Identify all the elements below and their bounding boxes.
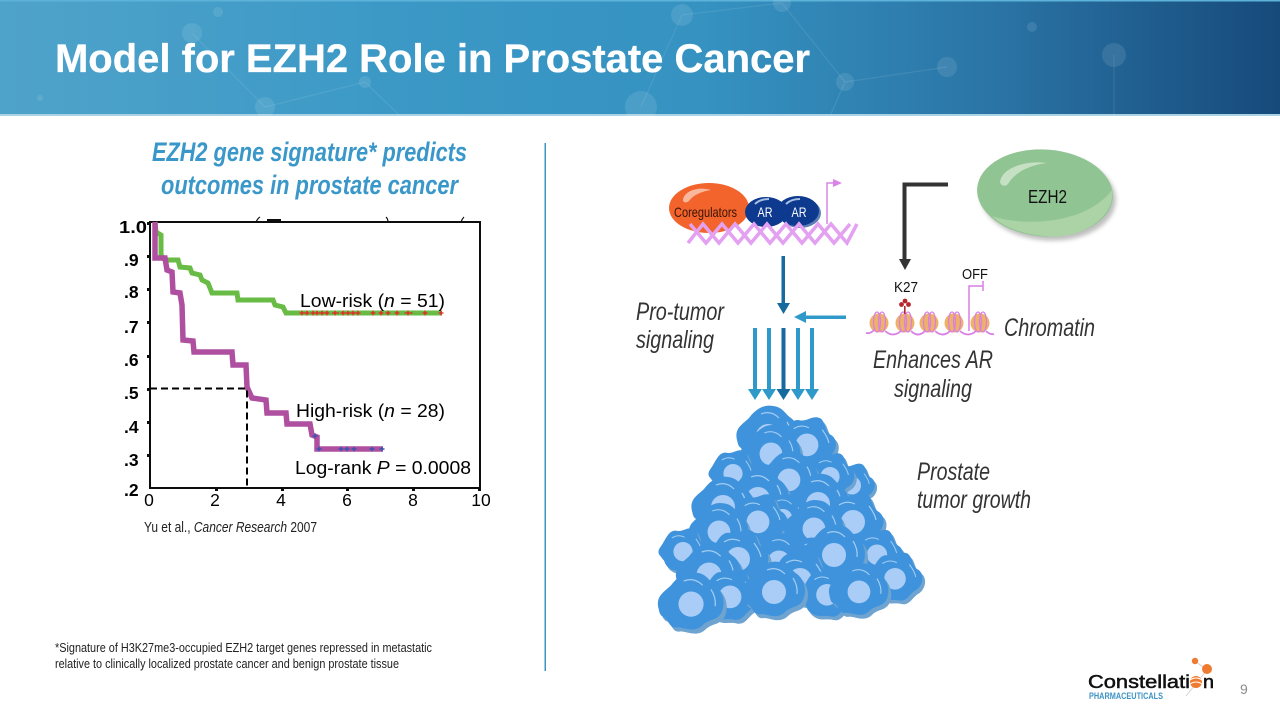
Kaplan-Meier survival chart <box>119 217 491 510</box>
coregulators oval: Coregulators <box>674 204 737 220</box>
Kaplan-Meier survival chart: .8 <box>124 282 139 302</box>
company logo: n <box>1203 672 1214 692</box>
Kaplan-Meier survival chart: .4 <box>124 417 139 437</box>
methyl mark <box>899 299 911 314</box>
Kaplan-Meier survival chart: 10 <box>471 490 491 510</box>
Kaplan-Meier survival chart: 0 <box>144 490 154 510</box>
title: Model for EZH2 Role in Prostate Cancer <box>55 37 810 81</box>
Kaplan-Meier survival chart: .9 <box>124 250 139 270</box>
Kaplan-Meier survival chart: 2 <box>210 490 220 510</box>
label: pro-tumor signaling: signaling <box>636 326 714 354</box>
page number: 9 <box>1240 681 1248 697</box>
Kaplan-Meier survival chart: Low-risk ( n = 51) <box>300 291 445 311</box>
arrows: pro-tumor signaling <box>748 328 819 400</box>
footnote <box>55 640 432 671</box>
DNA with coregulators and AR <box>669 179 857 243</box>
label: pro-tumor signaling <box>636 298 725 354</box>
DNA helix <box>688 224 857 243</box>
label: prostate tumor growth: tumor growth <box>917 486 1031 514</box>
chromatin nucleosomes <box>866 267 994 334</box>
EZH2 enzyme oval: EZH2 <box>1028 186 1067 207</box>
label: pro-tumor signaling: Pro-tumor <box>636 298 725 326</box>
divider <box>544 143 546 671</box>
footnote: *Signature of H3K27me3-occupied EZH2 target genes repressed in metastatic <box>55 640 432 655</box>
company logo: Constellati <box>1088 672 1190 692</box>
company logo <box>1088 658 1214 701</box>
Kaplan-Meier survival chart: .6 <box>124 350 139 370</box>
label: enhances AR signaling: signaling <box>894 375 972 403</box>
AR dimer <box>745 196 821 228</box>
Kaplan-Meier survival chart: 1.0 <box>119 217 147 237</box>
label: prostate tumor growth <box>917 458 1031 514</box>
heading: gene signature <box>152 137 467 200</box>
label: chromatin: Chromatin <box>1004 314 1095 342</box>
Kaplan-Meier survival chart: 8 <box>408 490 418 510</box>
AR dimer: AR <box>792 204 806 220</box>
Kaplan-Meier survival chart: 6 <box>342 490 352 510</box>
arrow: EZH2 to chromatin <box>899 184 948 270</box>
label: enhances AR signaling <box>873 346 993 403</box>
footnote: relative to clinically localized prostate cancer and benign prostate tissue <box>55 656 399 671</box>
off switch <box>969 281 983 331</box>
EZH2 enzyme oval <box>974 145 1119 245</box>
header banner <box>0 0 1280 123</box>
heading: gene signature: outcomes in prostate cancer <box>161 170 459 200</box>
citation: Yu et al., Cancer Research 2007 <box>144 520 317 536</box>
coregulators oval <box>669 183 749 233</box>
Kaplan-Meier survival chart: 4 <box>276 490 286 510</box>
label: prostate tumor growth: Prostate <box>917 458 990 486</box>
company logo: PHARMACEUTICALS <box>1089 691 1163 701</box>
tumor cell cluster <box>658 406 925 634</box>
arrow: chromatin to signal <box>794 311 846 323</box>
transcription start arrow <box>827 179 842 224</box>
K27 label: K27 <box>894 280 918 296</box>
Kaplan-Meier survival chart: .2 <box>124 480 139 500</box>
Kaplan-Meier survival chart: .7 <box>124 317 139 337</box>
Kaplan-Meier survival chart: .5 <box>124 383 139 403</box>
AR dimer: AR <box>758 204 772 220</box>
heading: gene signature: EZH2 gene signature* predicts <box>152 137 467 167</box>
OFF label: OFF <box>962 267 988 283</box>
Kaplan-Meier survival chart: .3 <box>124 450 139 470</box>
arrow: AR signal down <box>777 256 790 314</box>
Kaplan-Meier survival chart: Log-rank P = 0.0008 <box>295 458 471 478</box>
Kaplan-Meier survival chart: High-risk ( n = 28) <box>296 401 445 421</box>
label: enhances AR signaling: Enhances AR <box>873 346 993 374</box>
